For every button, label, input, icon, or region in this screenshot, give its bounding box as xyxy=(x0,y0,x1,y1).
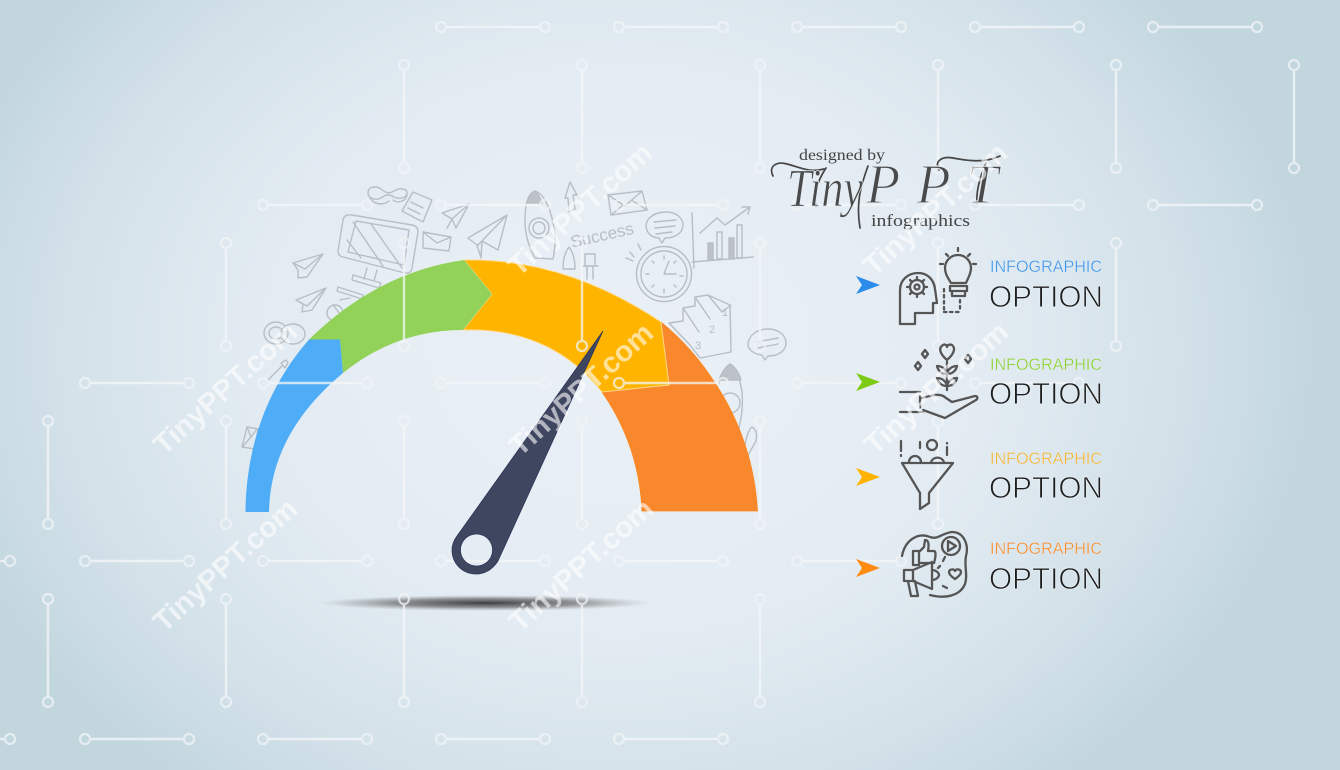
label: OPTION: OPTION xyxy=(989,376,1103,411)
logo flourishes xyxy=(772,156,1000,228)
TinyPPT.com watermarks: TinyPPT.com xyxy=(502,137,659,283)
option 2 xyxy=(856,345,1103,418)
gauge segment: orange xyxy=(602,322,758,511)
logo: designed by TinyPPT infographics xyxy=(772,147,1002,230)
gauge segment: amber xyxy=(463,260,669,392)
gauge segment: blue xyxy=(246,340,343,512)
icon: megaphone and social xyxy=(902,532,967,597)
shadow under gauge xyxy=(319,595,651,611)
label: INFOGRAPHIC: INFOGRAPHIC xyxy=(990,356,1102,374)
option 3 xyxy=(856,440,1103,509)
gauge needle xyxy=(452,331,603,574)
logo word: Tiny: Tiny xyxy=(787,158,863,218)
label: OPTION: OPTION xyxy=(989,561,1103,596)
logo word: PPT: PPT xyxy=(865,154,1002,216)
TinyPPT.com watermarks xyxy=(147,137,1015,639)
TinyPPT.com watermarks: TinyPPT.com xyxy=(147,493,304,639)
label: INFOGRAPHIC: INFOGRAPHIC xyxy=(990,540,1102,558)
doodle illustrations behind gauge: 2 xyxy=(709,324,715,336)
label: INFOGRAPHIC: INFOGRAPHIC xyxy=(990,450,1102,468)
TinyPPT.com watermarks: TinyPPT.com xyxy=(147,316,304,462)
doodle illustrations behind gauge xyxy=(242,182,786,457)
gauge: semicircular meter xyxy=(246,260,758,512)
TinyPPT.com watermarks: TinyPPT.com xyxy=(858,316,1015,462)
icon: funnel xyxy=(901,440,953,509)
TinyPPT.com watermarks: TinyPPT.com xyxy=(503,493,660,639)
icon: hand holding plant xyxy=(900,345,977,418)
doodle illustrations behind gauge: 3 xyxy=(695,340,701,352)
doodle illustrations behind gauge: Success xyxy=(569,219,636,252)
icon: head with gear and light bulb xyxy=(900,248,976,324)
doodle illustrations behind gauge: 1 xyxy=(722,307,728,319)
logo line: infographics: infographics xyxy=(871,211,970,230)
arrow: green xyxy=(856,373,880,391)
gauge segment: green xyxy=(309,260,492,373)
option 4 xyxy=(856,532,1103,597)
label: INFOGRAPHIC: INFOGRAPHIC xyxy=(990,258,1102,276)
arrow: amber xyxy=(856,468,880,486)
label: OPTION: OPTION xyxy=(989,279,1103,314)
label: OPTION: OPTION xyxy=(989,470,1103,505)
option 1 xyxy=(856,248,1103,324)
logo line: designed by: designed by xyxy=(799,147,885,164)
arrow: blue xyxy=(856,276,880,294)
TinyPPT.com watermarks: TinyPPT.com xyxy=(503,317,660,463)
TinyPPT.com watermarks: TinyPPT.com xyxy=(857,137,1014,283)
arrow: orange xyxy=(856,559,880,577)
